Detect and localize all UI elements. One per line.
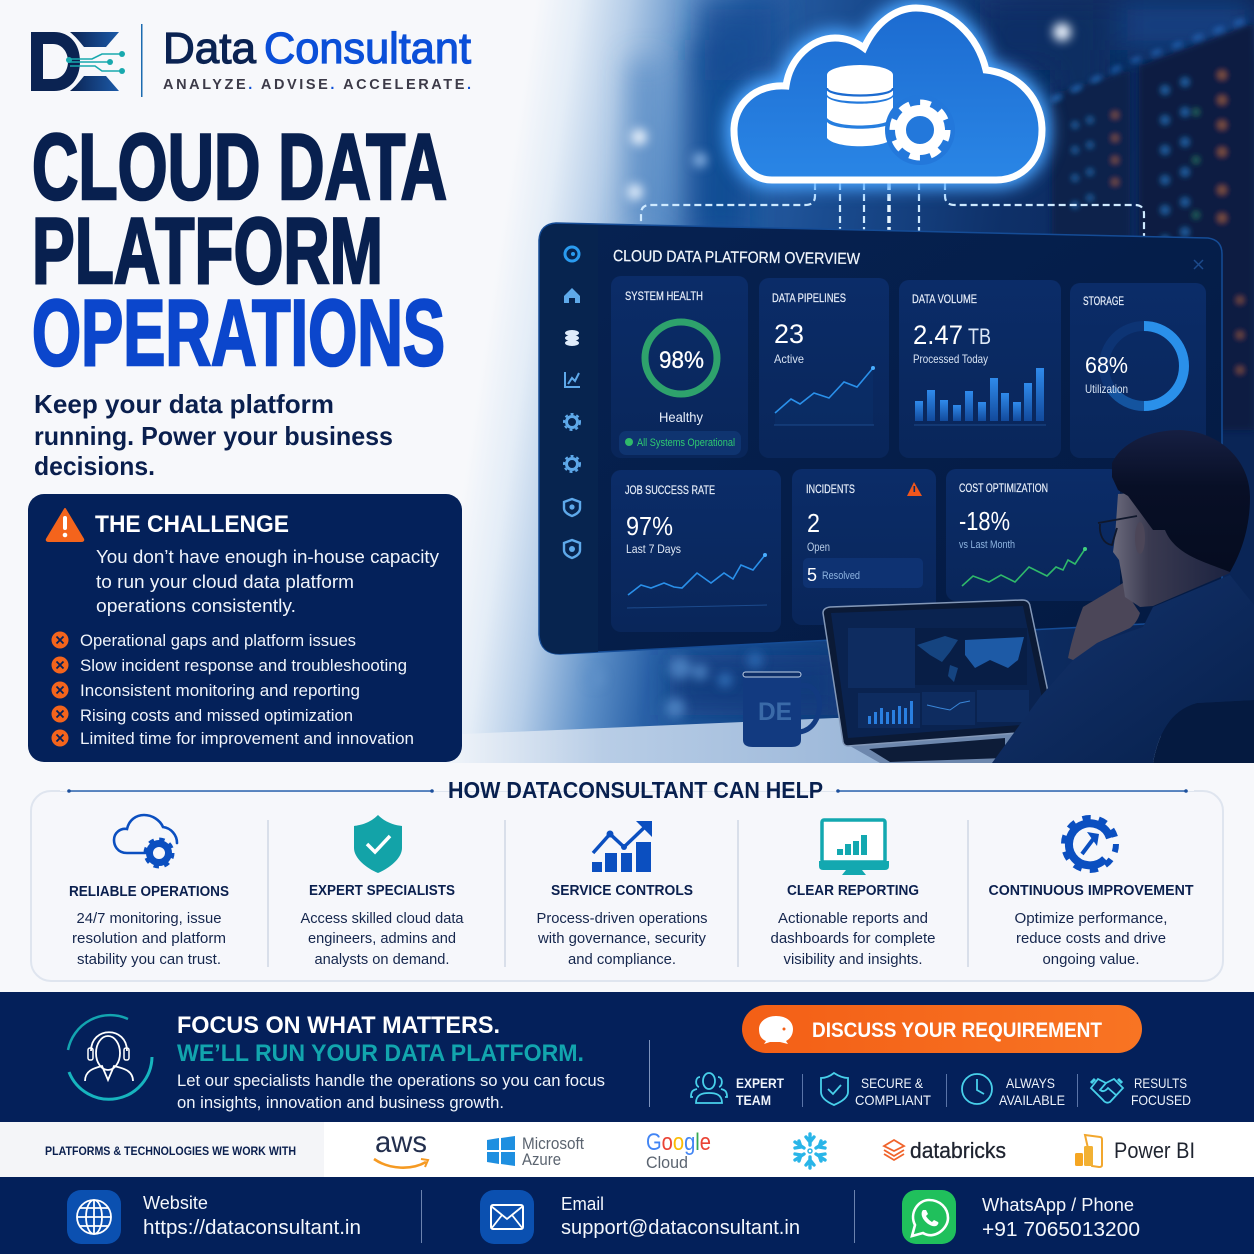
icon: team (691, 1073, 727, 1103)
logo: microsoft azure: Azure (522, 1151, 561, 1169)
icon: support agent (68, 1015, 152, 1099)
hand (1068, 583, 1140, 660)
logo: power bi (1075, 1135, 1195, 1167)
neck and face (1113, 490, 1232, 607)
badge: always available: AVAILABLE (999, 1092, 1065, 1108)
card: incidents (792, 469, 936, 625)
column: expert specialists: analysts on demand. (314, 951, 450, 968)
laptop screen contents (848, 628, 1029, 728)
column: continuous improvement: ongoing value. (1042, 951, 1140, 968)
badge: results focused: FOCUSED (1131, 1092, 1191, 1108)
contact: email (480, 1190, 800, 1244)
card: incidents: 2 (807, 508, 820, 538)
banner text: Let our specialists handle the operations so you can focus (177, 1072, 605, 1090)
challenge heading: THE CHALLENGE (95, 511, 289, 538)
man at desk, seen from behind (992, 430, 1254, 763)
main title (32, 114, 447, 385)
column: continuous improvement: Optimize performance, (1014, 910, 1168, 927)
card: job success rate: 97% (626, 511, 673, 541)
banner text (177, 1072, 605, 1112)
coffee mug with logo: DE (758, 698, 792, 726)
card: incidents: 5 (807, 565, 817, 585)
column: expert specialists: Access skilled cloud data (300, 910, 464, 927)
logo: google cloud: Cloud (646, 1153, 688, 1172)
card: data pipelines: 23 (774, 319, 804, 349)
connector lines: cloud to dashboard (641, 183, 1144, 238)
column: clear reporting (770, 820, 936, 968)
icon: monitor chart (819, 820, 889, 875)
sidebar icons (564, 247, 580, 558)
banner heading (177, 1012, 584, 1067)
card: job success rate: JOB SUCCESS RATE (625, 483, 715, 497)
card: data volume: TB (968, 324, 991, 349)
heading rules backing (60, 775, 1194, 791)
challenge list: Rising costs and missed optimization (80, 706, 353, 725)
server racks (1052, 20, 1254, 430)
laptop (823, 600, 1056, 763)
logo wordmark (163, 24, 471, 73)
card: system health: Healthy (659, 409, 703, 425)
hair (1112, 430, 1250, 572)
challenge list (52, 631, 414, 748)
column: continuous improvement (988, 818, 1194, 968)
banner heading: WE’LL RUN YOUR DATA PLATFORM. (177, 1040, 584, 1067)
column: expert specialists: engineers, admins and (308, 930, 456, 947)
column: clear reporting: CLEAR REPORTING (787, 883, 919, 899)
hero image: cloud dashboard scene (440, 0, 1254, 763)
logo wordmark: Consultant (264, 24, 471, 73)
logo: microsoft azure: Microsoft (522, 1135, 584, 1153)
card: data volume (899, 280, 1061, 458)
logo divider (141, 24, 142, 97)
card: incidents: Open (807, 540, 830, 554)
panel: call to action banner (0, 992, 1254, 1122)
badge: always available: ALWAYS (1006, 1075, 1055, 1091)
contact: email: support@dataconsultant.in (561, 1217, 800, 1239)
logo: microsoft azure (487, 1135, 584, 1169)
contact: email: Email (561, 1194, 604, 1214)
icon: cloud with database and gear (734, 8, 1042, 180)
column: service controls: SERVICE CONTROLS (551, 883, 693, 899)
card: storage: 68% (1085, 352, 1128, 378)
challenge list: Slow incident response and troubleshooting (80, 656, 407, 675)
card: job success rate (611, 470, 781, 632)
logo tagline: ANALYZE. ADVISE. ACCELERATE. (163, 77, 471, 93)
column: clear reporting: visibility and insights. (784, 951, 922, 968)
icon: warning triangle (47, 509, 83, 541)
contact: whatsapp phone: WhatsApp / Phone (982, 1195, 1134, 1215)
badge: secure and compliant: SECURE & (861, 1075, 924, 1091)
card: cost optimization: vs Last Month (959, 539, 1015, 551)
contact: website: https://dataconsultant.in (143, 1217, 361, 1239)
column: service controls: with governance, security (537, 930, 706, 947)
card: data pipelines: Active (774, 352, 804, 366)
card: data volume: 2.47 (913, 320, 963, 350)
banner heading: FOCUS ON WHAT MATTERS. (177, 1012, 500, 1039)
card: cost optimization: -18% (959, 506, 1010, 536)
card: system health: 98% (659, 347, 704, 374)
hero backdrop: data centre (440, 0, 1254, 763)
card: job success rate: Last 7 Days (626, 542, 681, 556)
logo: databricks: databricks (910, 1138, 1006, 1163)
badge: results focused (1091, 1075, 1191, 1108)
banner text: on insights, innovation and business growth. (177, 1094, 504, 1112)
chair (1153, 700, 1254, 763)
bokeh lights (586, 23, 1071, 718)
dashboard sidebar (540, 224, 598, 654)
column: expert specialists: EXPERT SPECIALISTS (309, 883, 455, 899)
dashboard title: CLOUD DATA PLATFORM OVERVIEW (613, 248, 861, 268)
icon: database (827, 65, 893, 146)
button: discuss your requirement: DISCUSS YOUR REQUIREMENT (812, 1018, 1102, 1042)
card: data pipelines (759, 278, 889, 458)
contact: website (67, 1190, 361, 1244)
column: expert specialists (300, 815, 464, 968)
icon: gear (885, 100, 952, 165)
contact: whatsapp phone (902, 1190, 1140, 1244)
panel: platforms and technologies strip (0, 1122, 1254, 1177)
icon: clock (962, 1074, 992, 1104)
card: system health (611, 276, 748, 458)
icon: cloud gear (114, 815, 177, 866)
logo wordmark: Data (163, 24, 257, 73)
icon: shield (821, 1073, 848, 1105)
subtitle: decisions. (34, 451, 155, 481)
strip label: PLATFORMS & TECHNOLOGIES WE WORK WITH (45, 1146, 296, 1158)
button: discuss your requirement (742, 1005, 1142, 1053)
challenge list: Limited time for improvement and innovation (80, 729, 414, 748)
challenge list: Inconsistent monitoring and reporting (80, 681, 360, 700)
card: data pipelines: DATA PIPELINES (772, 291, 846, 305)
column: reliable operations: resolution and platform (72, 930, 226, 947)
card: cost optimization (946, 469, 1120, 601)
desk (440, 718, 1254, 763)
column: service controls (536, 821, 708, 968)
card: cost optimization: COST OPTIMIZATION (959, 481, 1048, 495)
card: incidents: Resolved (822, 570, 860, 582)
icon: handshake (1091, 1079, 1123, 1103)
card: system health: All Systems Operational (637, 437, 735, 449)
column: clear reporting: Actionable reports and (778, 910, 928, 927)
panel: how DataConsultant can help (31, 775, 1223, 981)
card: storage (1070, 283, 1206, 458)
column: reliable operations: RELIABLE OPERATIONS (69, 884, 229, 900)
subtitle: Keep your data platform (34, 389, 334, 419)
card: incidents: INCIDENTS (806, 482, 855, 496)
card: data volume: Processed Today (913, 352, 988, 366)
subtitle: running. Power your business (34, 421, 393, 451)
logo: power bi: Power BI (1114, 1138, 1195, 1163)
badge: results focused: RESULTS (1134, 1075, 1187, 1091)
icon: gear with arrow (1064, 818, 1116, 870)
coffee mug with logo (743, 672, 820, 747)
badge: secure and compliant: COMPLIANT (855, 1092, 931, 1108)
challenge description: to run your cloud data platform (96, 571, 354, 592)
badge: expert team: EXPERT (736, 1075, 784, 1091)
logo: aws: aws (375, 1126, 427, 1159)
challenge description: operations consistently. (96, 595, 296, 616)
help heading: HOW DATACONSULTANT CAN HELP (448, 777, 823, 803)
card: storage: Utilization (1085, 382, 1128, 396)
logo (31, 24, 471, 97)
logo mark: DE circuit (31, 32, 125, 91)
logo: google cloud (646, 1129, 711, 1172)
badge: expert team (691, 1073, 784, 1108)
column: continuous improvement: reduce costs and drive (1016, 930, 1166, 947)
glasses (1098, 516, 1137, 545)
dashboard monitor (539, 223, 1222, 654)
contact: whatsapp phone: +91 7065013200 (982, 1219, 1140, 1241)
logo: snowflake (795, 1134, 825, 1168)
challenge list: Operational gaps and platform issues (80, 631, 356, 650)
main title: OPERATIONS (32, 280, 445, 385)
close mark (1194, 260, 1203, 269)
main title: CLOUD DATA (32, 114, 447, 219)
subtitle (34, 389, 393, 481)
column: continuous improvement: CONTINUOUS IMPROVEMENT (988, 883, 1194, 899)
card: system health: SYSTEM HEALTH (625, 289, 703, 303)
column: service controls: and compliance. (568, 951, 676, 968)
column: reliable operations: 24/7 monitoring, issue (76, 910, 222, 927)
ear (1135, 524, 1145, 552)
badge: always available (962, 1074, 1065, 1108)
panel: contact bar (0, 1177, 1254, 1254)
challenge description: You don’t have enough in-house capacity (96, 546, 440, 567)
main title: PLATFORM (32, 198, 383, 303)
badge: secure and compliant (821, 1073, 931, 1108)
panel: the challenge (28, 494, 462, 762)
badge: expert team: TEAM (736, 1092, 771, 1108)
icon: shield check (354, 815, 402, 873)
column: reliable operations: stability you can trust. (77, 951, 221, 968)
icon: growth chart (592, 821, 652, 872)
logo: google cloud: Google (646, 1129, 711, 1156)
card: storage: STORAGE (1083, 294, 1124, 308)
challenge description (96, 546, 440, 616)
column: reliable operations (69, 815, 229, 968)
jacket (992, 575, 1254, 763)
column: service controls: Process-driven operations (536, 910, 708, 927)
contact: website: Website (143, 1193, 208, 1213)
card: data volume: DATA VOLUME (912, 292, 977, 306)
column: clear reporting: dashboards for complete (770, 930, 936, 947)
